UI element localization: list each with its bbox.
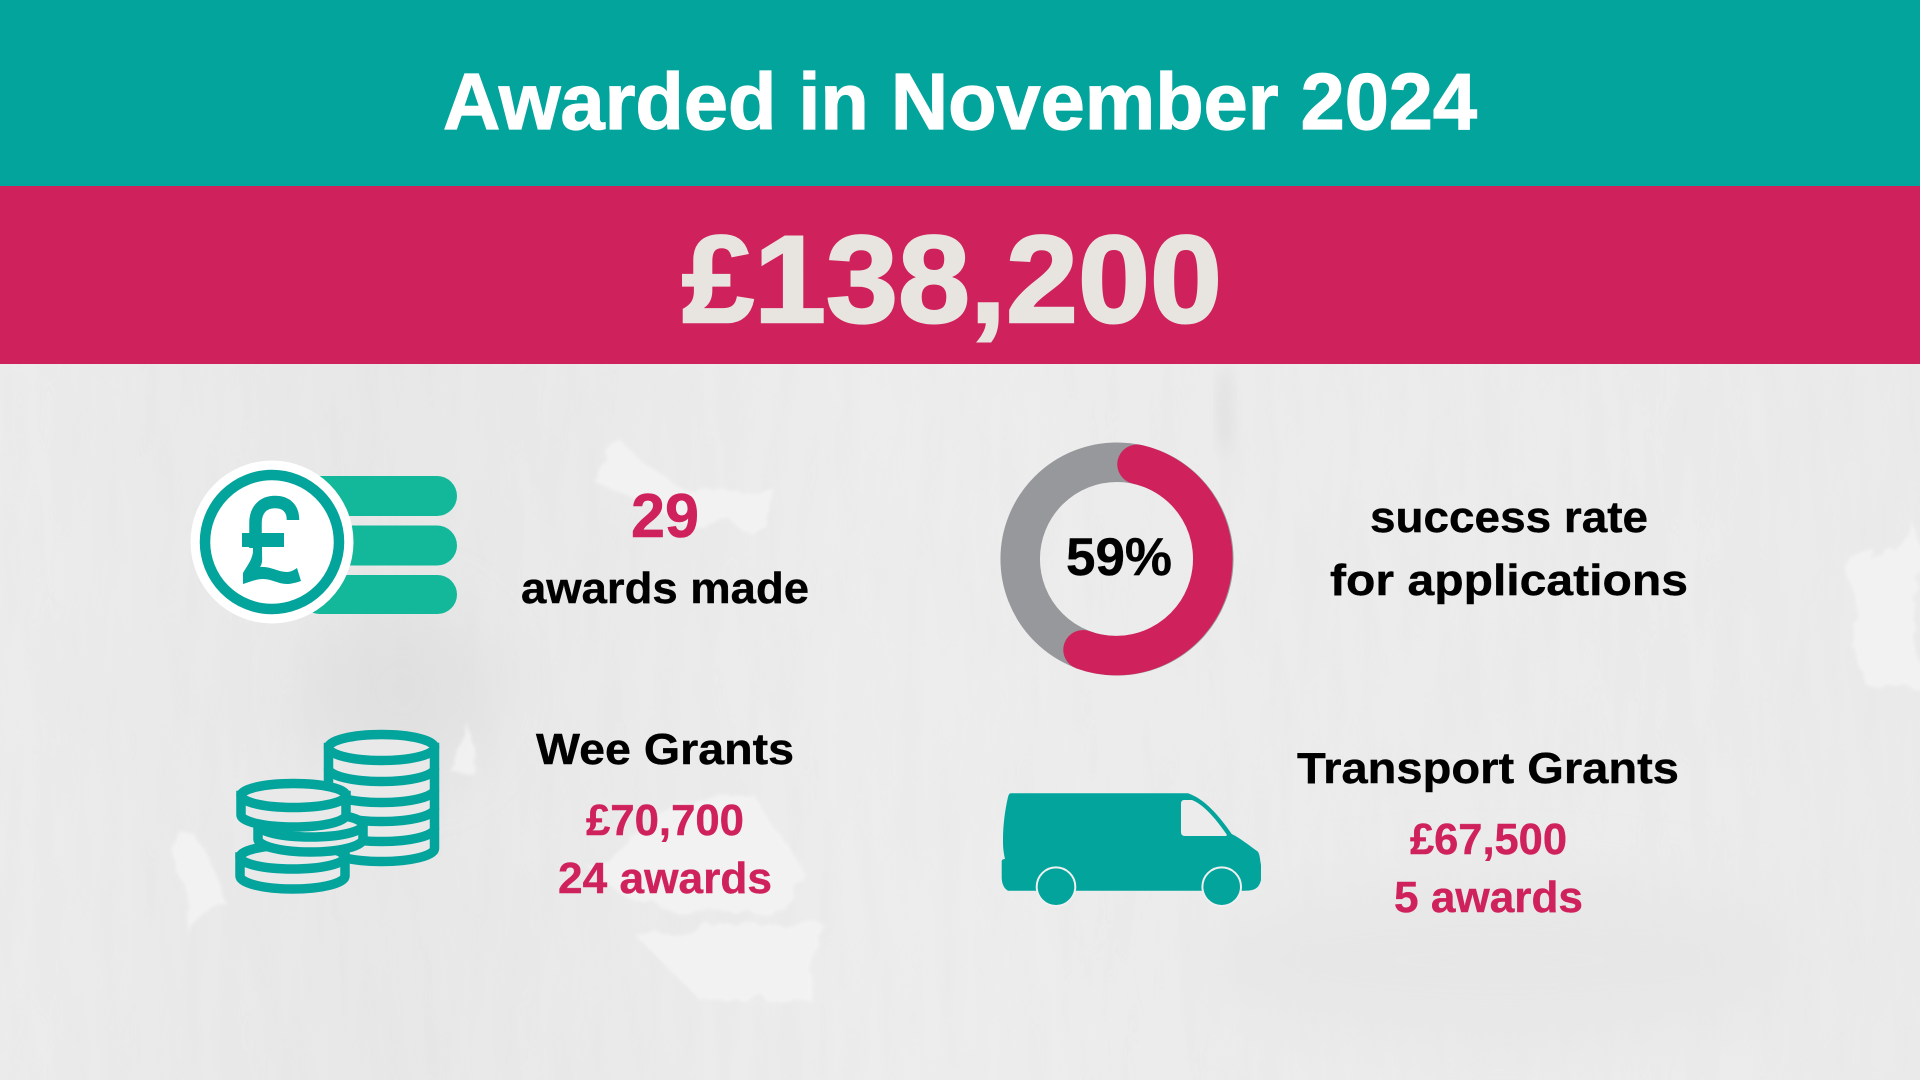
icon: van [1002,793,1261,906]
wee grants heading: Wee Grants [536,726,794,774]
stat: wee grants [536,726,794,903]
stat: success rate [1330,494,1688,605]
icon: pound coin with bars [190,460,457,624]
icon: coin stacks [240,734,434,889]
paper texture background [0,364,1920,1080]
transport grants count: 5 awards [1394,874,1583,922]
total amount: £138,200 [682,211,1222,349]
stat: transport grants [1297,745,1679,922]
donut value: 59% [1066,528,1172,587]
wee grants count: 24 awards [558,855,772,903]
title: Awarded in November 2024 [443,57,1477,146]
transport grants amount: £67,500 [1410,816,1567,864]
awards made label: awards made [521,565,809,613]
header band: teal [0,0,1920,186]
stat: awards made [521,482,809,613]
stat: success rate: for applications [1330,557,1688,605]
wee grants amount: £70,700 [586,797,744,845]
number of awards: 29 [631,482,699,551]
stat: success rate: success rate [1370,494,1648,542]
total band: pink [0,186,1920,364]
donut chart: 59 percent [1020,462,1214,656]
transport grants heading: Transport Grants [1297,745,1679,793]
